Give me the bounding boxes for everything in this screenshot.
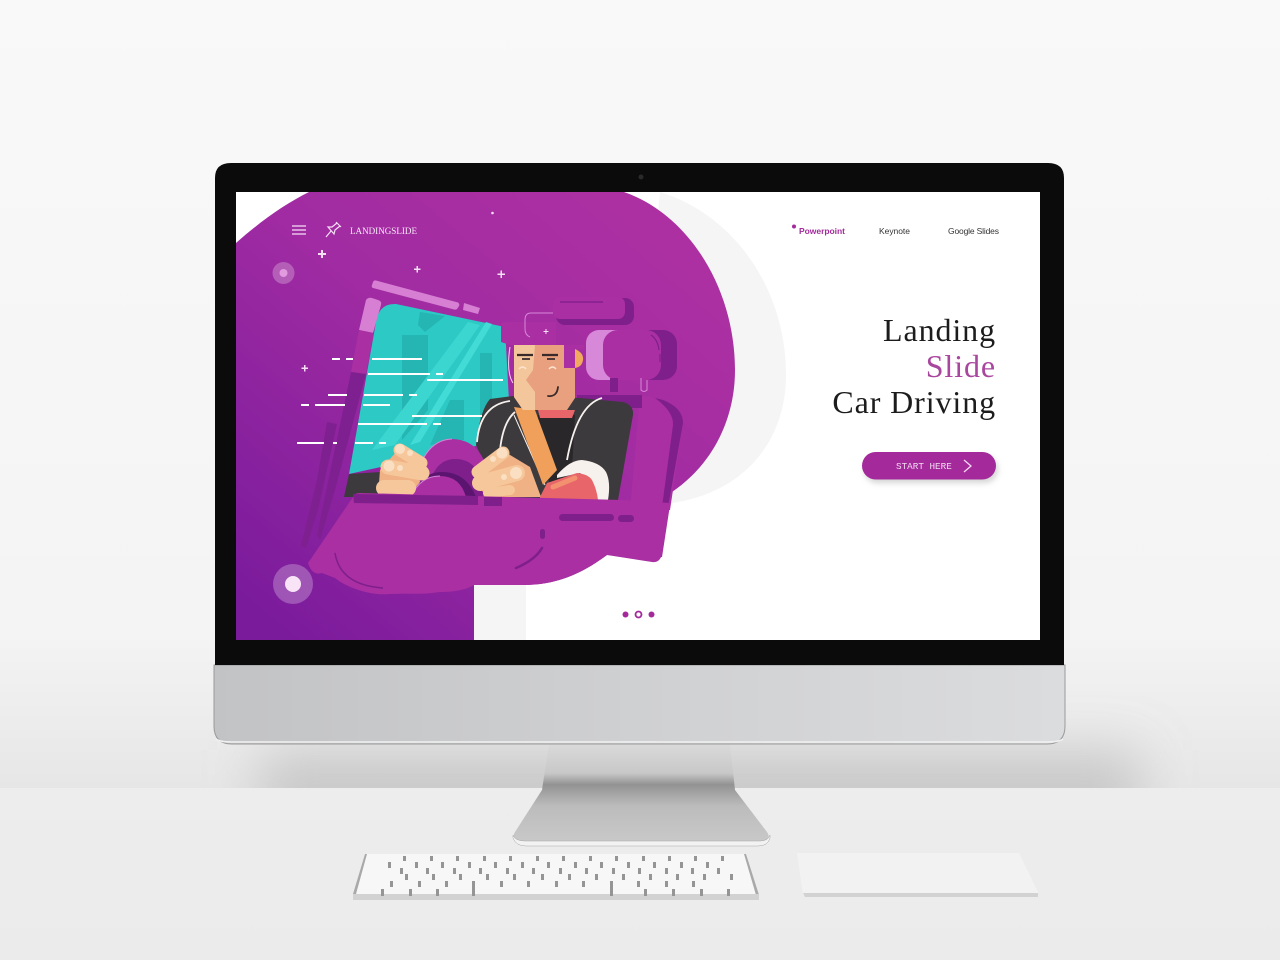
seat back — [577, 395, 683, 510]
decorative circle top-left — [272, 262, 294, 284]
menu icon — [292, 226, 306, 234]
background: wall and desk — [0, 691, 1280, 960]
seat belt — [514, 407, 557, 485]
pin icon — [326, 222, 341, 237]
left hand — [378, 444, 422, 497]
right hand — [478, 448, 541, 497]
hat visor — [553, 297, 634, 325]
navigation: Keynote — [879, 226, 910, 236]
sparkles — [302, 212, 505, 372]
window top bars — [372, 280, 480, 314]
title: Landing — [883, 312, 996, 348]
keyboard — [353, 854, 759, 900]
navigation: Google Slides — [948, 226, 999, 236]
purple background blob — [236, 192, 735, 640]
grey shadow blob — [474, 192, 786, 640]
trackpad — [797, 853, 1038, 897]
start button: START HERE — [896, 461, 952, 472]
monitor stand — [513, 744, 770, 846]
screen: landing slide — [236, 192, 1040, 640]
monitor body — [214, 163, 1065, 744]
seat headrest — [586, 330, 677, 392]
eyes and smile — [517, 354, 558, 356]
brand name: LANDINGSLIDE — [350, 227, 417, 237]
speed lines — [297, 359, 503, 443]
decorative circle bottom-left — [273, 564, 313, 604]
driver head — [501, 313, 584, 418]
navigation: Powerpoint — [799, 226, 845, 236]
driver torso — [476, 396, 633, 500]
title — [832, 312, 996, 420]
start button — [862, 452, 998, 483]
steering wheel — [411, 439, 490, 497]
navigation — [792, 224, 999, 236]
hair — [501, 326, 575, 368]
pagination dots — [622, 612, 654, 618]
windscreen with city — [349, 304, 510, 474]
title: Slide — [926, 348, 996, 384]
A-pillar — [301, 298, 381, 548]
dashboard — [308, 493, 670, 594]
lower-left interior — [344, 472, 380, 497]
title: Car Driving — [832, 384, 996, 420]
sleeve cuff and forearm — [540, 460, 609, 500]
